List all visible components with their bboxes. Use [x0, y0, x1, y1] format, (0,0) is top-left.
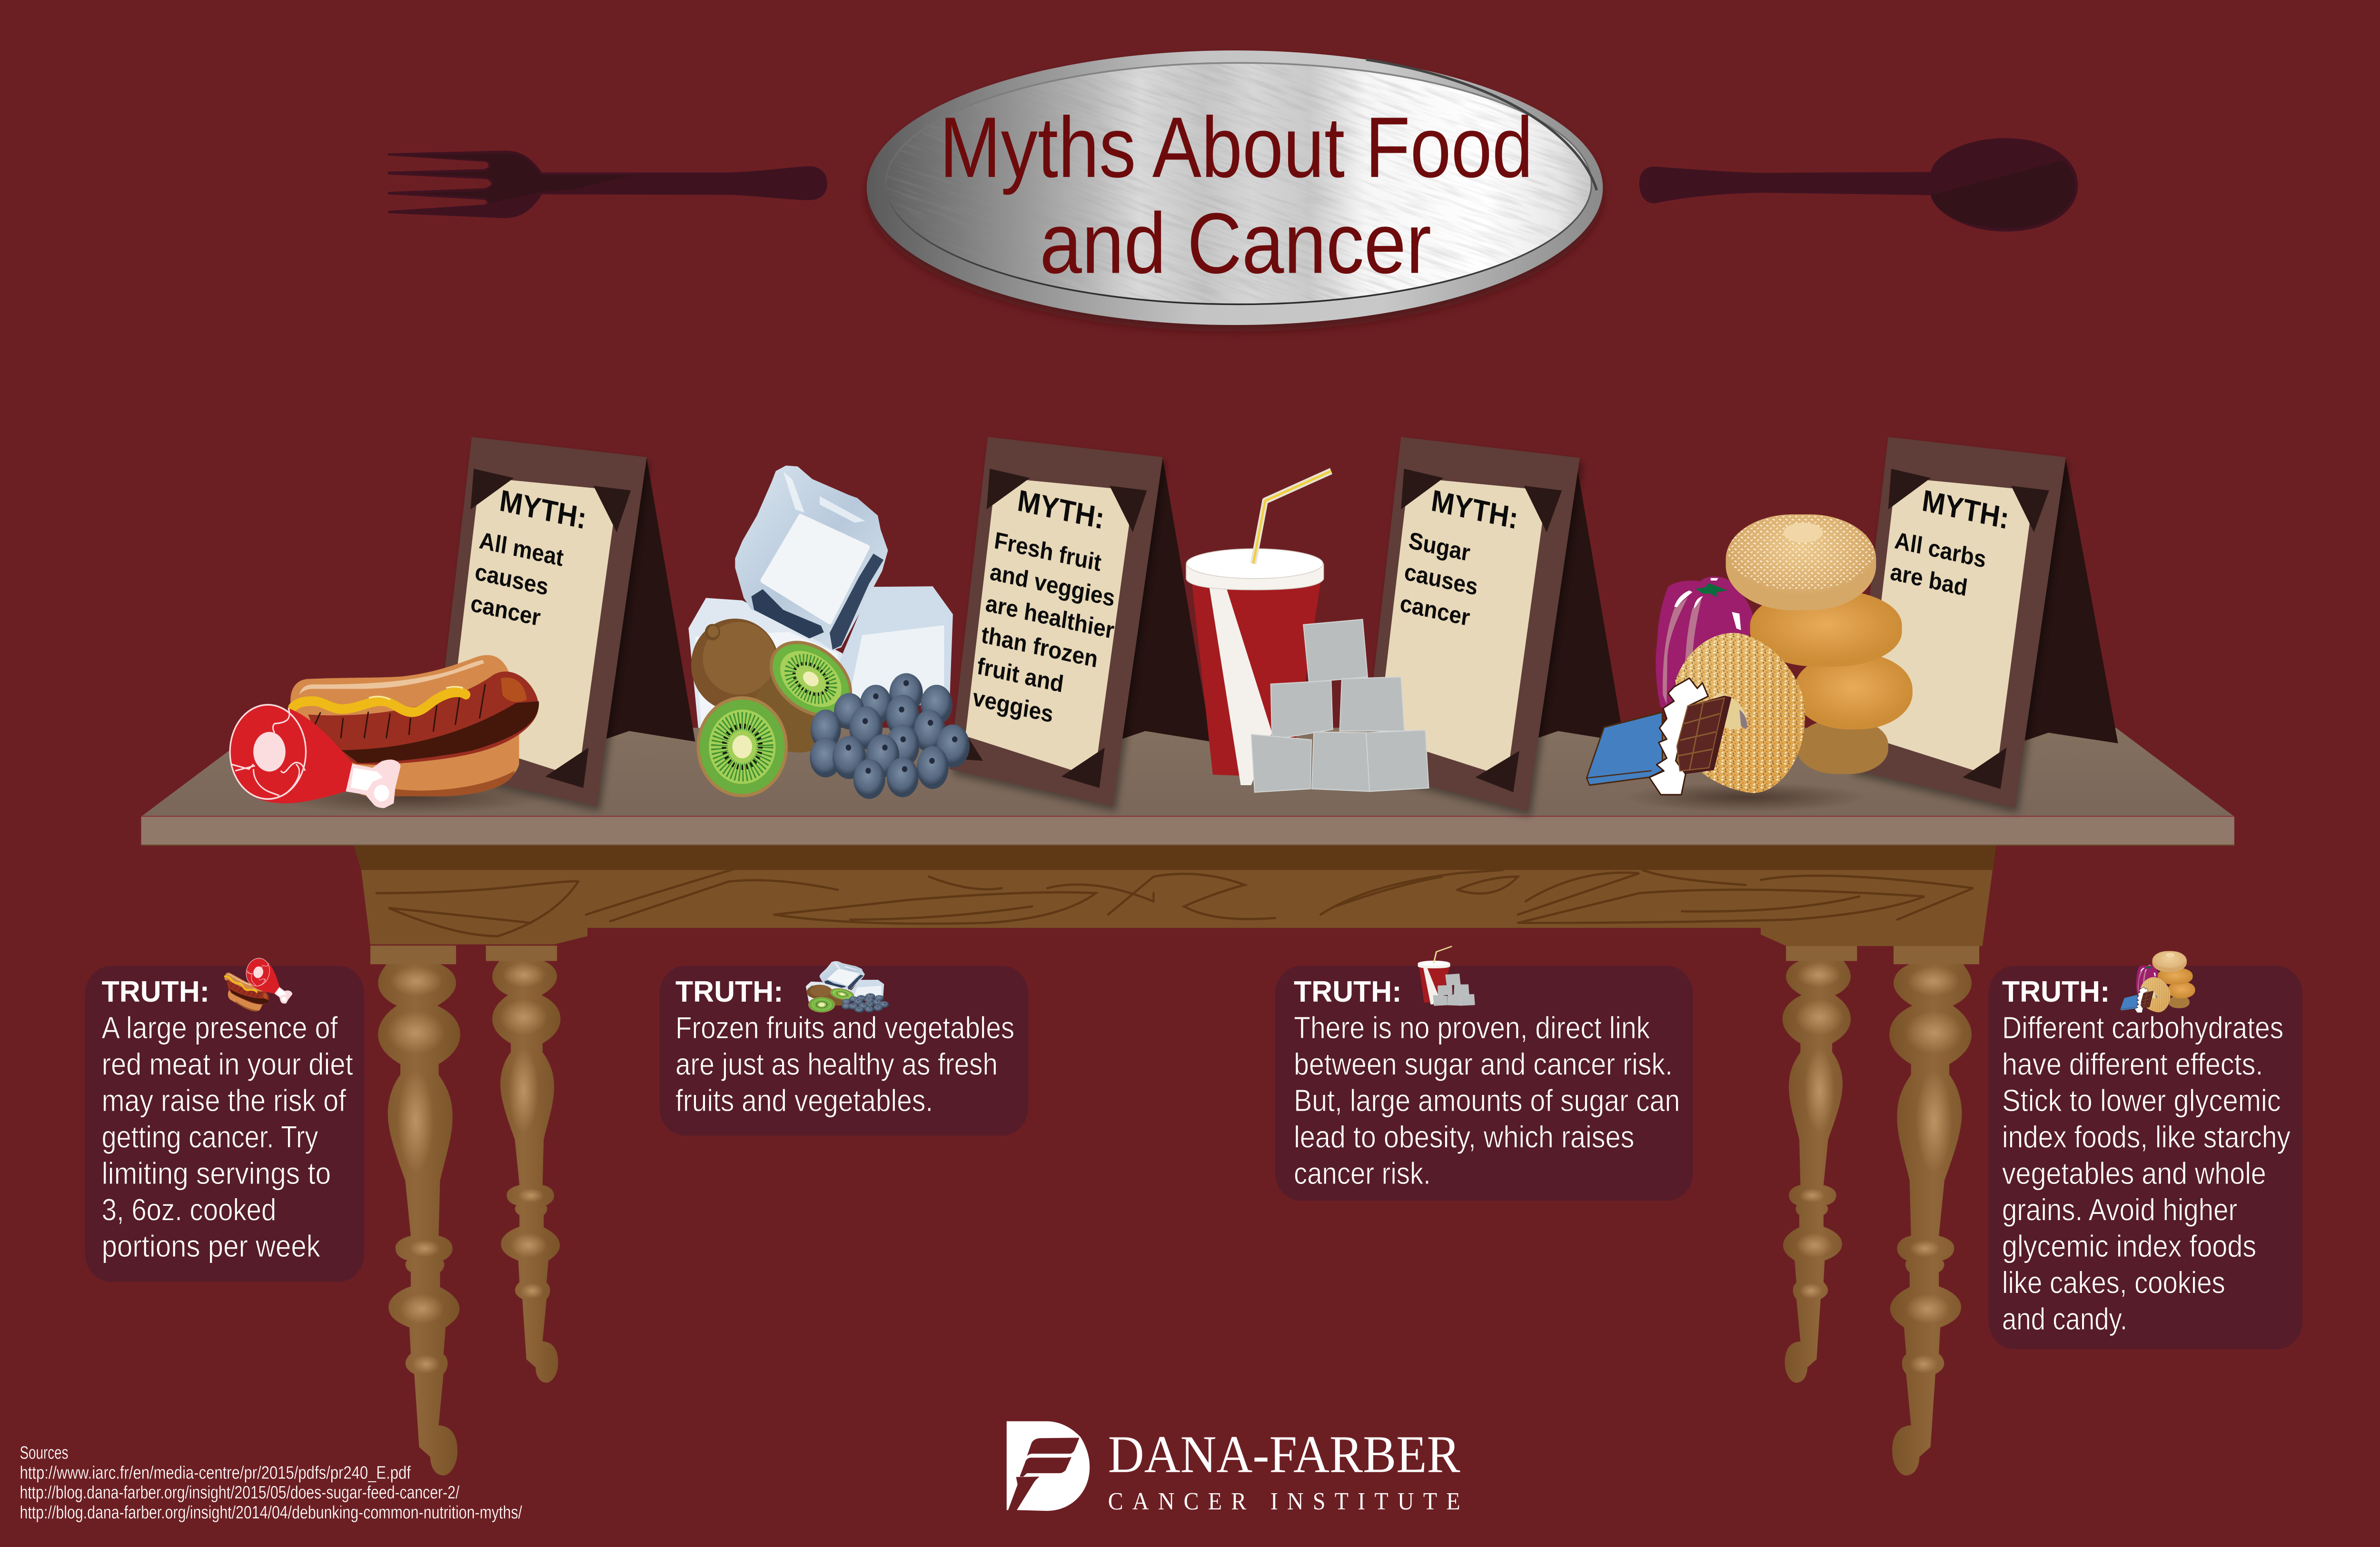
- icon: hot dog and ham: [217, 954, 299, 1017]
- card text: cancer: [1398, 590, 1471, 631]
- food: ice, kiwi and blueberries: [688, 465, 970, 799]
- card front: [1850, 437, 2066, 808]
- card text: [1889, 483, 2011, 605]
- card text: [971, 483, 1124, 739]
- left inner leg: [486, 946, 560, 1383]
- card text: MYTH:: [1015, 483, 1107, 535]
- left outer leg: [370, 946, 460, 1476]
- card paper: [965, 477, 1134, 778]
- card tent back: [605, 457, 695, 742]
- sources: http://blog.dana-farber.org/insight/2014/04/debunking-common-nutrition-myths/: [20, 1502, 523, 1522]
- heading: TRUTH:: [675, 975, 783, 1008]
- heading: TRUTH:: [102, 975, 209, 1008]
- card tent back: [1121, 457, 1211, 742]
- body text: and candy.: [2002, 1302, 2127, 1336]
- body text: have different effects.: [2002, 1047, 2263, 1082]
- title plate: [865, 50, 1605, 334]
- panel: myth card 3: [1363, 437, 1624, 811]
- stacked bagels: [1726, 514, 1913, 774]
- card paper: [1865, 477, 2034, 778]
- soda cup: [1186, 549, 1324, 785]
- icon: bagels and candy: [2120, 951, 2195, 1013]
- title plate: and Cancer: [1040, 195, 1431, 291]
- table shadows under food: [273, 781, 1867, 814]
- card front: [949, 437, 1163, 806]
- body text: index foods, like starchy: [2002, 1120, 2291, 1154]
- table apron: [354, 845, 1996, 946]
- card text: are bad: [1889, 558, 1969, 601]
- logo mark: [1007, 1421, 1090, 1511]
- body text: portions per week: [102, 1230, 321, 1263]
- food: soda and sugar cubes: [1186, 471, 1429, 792]
- body text: But, large amounts of sugar can: [1294, 1084, 1680, 1118]
- logo: Dana-Farber: [1007, 1421, 1460, 1515]
- purple pepper: [1656, 577, 1753, 709]
- card text: [469, 483, 589, 634]
- sources: Sources: [20, 1442, 68, 1463]
- body text: Stick to lower glycemic: [2002, 1084, 2281, 1118]
- heading: TRUTH:: [2002, 975, 2110, 1008]
- ham: [230, 705, 400, 808]
- table legs: [370, 946, 1979, 1476]
- food: hot dog and ham: [230, 655, 539, 808]
- card paper: [449, 477, 618, 778]
- card text: All carbs: [1893, 527, 1988, 573]
- card text: fruit and: [975, 653, 1065, 698]
- card text: MYTH:: [1429, 483, 1520, 535]
- card text: MYTH:: [1920, 483, 2011, 535]
- body text: [2002, 1011, 2291, 1336]
- body text: A large presence of: [102, 1011, 338, 1045]
- kiwi half back: [757, 625, 865, 733]
- card corners: [1401, 469, 1562, 792]
- right outer leg: [1889, 946, 1979, 1476]
- heading: TRUTH:: [1294, 975, 1402, 1008]
- seeded bagel: [1676, 633, 1805, 793]
- food: bagels and candy: [1587, 514, 1913, 795]
- icon: spoon silhouette: [1639, 138, 2078, 232]
- card text: cancer: [469, 590, 542, 631]
- panel: myth card 4: [1850, 437, 2118, 808]
- card paper: [1378, 477, 1547, 778]
- body text: vegetables and whole: [2002, 1157, 2266, 1191]
- card text: [1398, 483, 1520, 632]
- body text: 3, 6oz. cooked: [102, 1193, 276, 1227]
- table top surface: [141, 728, 2234, 817]
- card front: [433, 437, 647, 806]
- card text: causes: [473, 558, 550, 601]
- card text: than frozen: [980, 621, 1100, 673]
- sources: http://www.iarc.fr/en/media-centre/pr/2015/pdfs/pr240_E.pdf: [20, 1462, 411, 1483]
- body text: getting cancer. Try: [102, 1120, 318, 1154]
- icon: fork silhouette: [388, 151, 827, 218]
- body text: are just as healthy as fresh: [675, 1047, 998, 1082]
- card text: causes: [1403, 558, 1479, 601]
- body text: like cakes, cookies: [2002, 1266, 2225, 1300]
- body text: [102, 1011, 353, 1263]
- body text: fruits and vegetables.: [675, 1084, 933, 1118]
- body text: between sugar and cancer risk.: [1294, 1047, 1673, 1082]
- card corners: [1888, 469, 2049, 789]
- body text: lead to obesity, which raises: [1294, 1120, 1634, 1154]
- body text: Frozen fruits and vegetables: [675, 1011, 1014, 1045]
- card tent back: [2024, 459, 2118, 743]
- panel: truth about frozen produce: [659, 961, 1028, 1135]
- card text: All meat: [478, 527, 565, 572]
- card corners: [443, 469, 631, 788]
- plate rim: [867, 50, 1603, 325]
- blue candy wrapper: [1587, 712, 1662, 785]
- body text: grains. Avoid higher: [2002, 1193, 2237, 1227]
- icon: soda and sugar: [1418, 946, 1475, 1006]
- panel: myth card 1: [433, 437, 695, 806]
- panel: truth about meat: [85, 954, 364, 1282]
- table top front edge: [141, 816, 2234, 846]
- whole kiwi: [691, 619, 844, 752]
- body text: cancer risk.: [1294, 1157, 1431, 1191]
- panel: myth card 2: [949, 437, 1211, 806]
- body text: glycemic index foods: [2002, 1230, 2256, 1263]
- body text: [675, 1011, 1014, 1118]
- mustard: [293, 692, 466, 712]
- ice cubes: [688, 465, 953, 736]
- logo: Dana-Farber: CANCER INSTITUTE: [1108, 1487, 1460, 1515]
- card front: [1363, 437, 1580, 811]
- card text: Fresh fruit: [993, 527, 1103, 577]
- foil wrapper: [1649, 678, 1708, 795]
- card text: are healthier: [984, 590, 1116, 644]
- plate centre: [886, 58, 1598, 305]
- card text: Sugar: [1407, 527, 1472, 567]
- card tent back: [1534, 457, 1624, 742]
- blueberries: [810, 673, 970, 799]
- card text: veggies: [971, 684, 1055, 728]
- icon: ice kiwi blueberries: [806, 961, 889, 1013]
- logo wordmark: DANA-FARBER: [1108, 1425, 1460, 1484]
- body text: may raise the risk of: [102, 1084, 347, 1118]
- body text: [1294, 1011, 1680, 1191]
- sources: [20, 1442, 523, 1522]
- chocolate bar: [1677, 696, 1732, 774]
- card text: and veggies: [988, 558, 1117, 612]
- kiwi half front: [697, 696, 788, 797]
- hot dog: [290, 655, 539, 797]
- straw: [1253, 471, 1331, 564]
- right inner leg: [1783, 946, 1857, 1383]
- body text: There is no proven, direct link: [1294, 1011, 1650, 1045]
- card corners: [959, 469, 1147, 788]
- panel: truth about sugar: [1275, 946, 1693, 1201]
- card text: MYTH:: [497, 483, 589, 535]
- wood grain: [377, 862, 1973, 936]
- panel: truth about carbs: [1988, 951, 2302, 1349]
- body text: red meat in your diet: [102, 1047, 353, 1082]
- body text: Different carbohydrates: [2002, 1011, 2283, 1045]
- body text: limiting servings to: [102, 1157, 331, 1191]
- sugar cubes: [1251, 620, 1429, 792]
- sources: http://blog.dana-farber.org/insight/2015/05/does-sugar-feed-cancer-2/: [20, 1482, 460, 1502]
- title text: Myths About Food: [940, 99, 1533, 195]
